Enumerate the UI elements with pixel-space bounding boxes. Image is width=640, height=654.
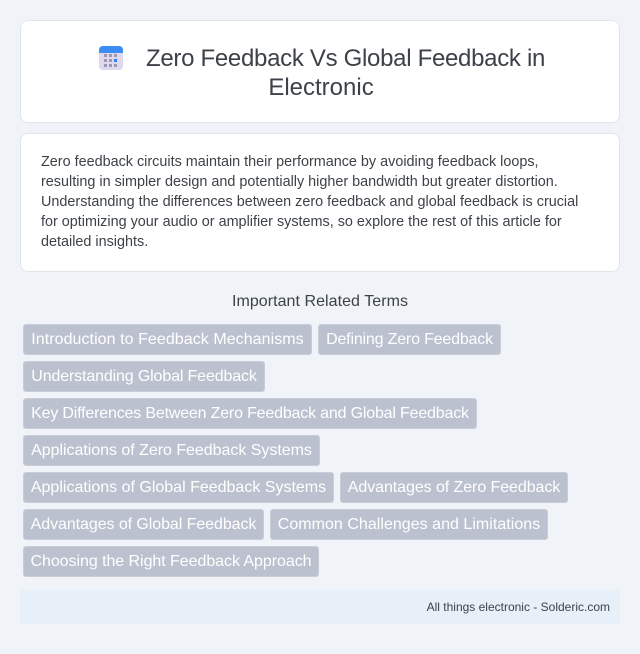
tag [23, 361, 265, 392]
tag: Understanding Global Feedback [31, 368, 257, 385]
footer text: All things electronic - Solderic.com [427, 600, 610, 614]
intro paragraph: for optimizing your audio or amplifier systems, so explore the rest of this article for [41, 214, 562, 230]
tag: Applications of Global Feedback Systems [31, 479, 326, 496]
panel: title card [20, 20, 620, 123]
tag: Applications of Zero Feedback Systems [31, 442, 312, 459]
title: Electronic [268, 74, 374, 101]
tag [23, 509, 264, 540]
icon: calendar [99, 46, 123, 70]
tag: Choosing the Right Feedback Approach [30, 553, 312, 570]
tag [23, 398, 477, 429]
tag [318, 324, 501, 355]
tag [23, 324, 312, 355]
tag: Common Challenges and Limitations [278, 516, 540, 533]
intro paragraph: Zero feedback circuits maintain their performance by avoiding feedback loops, [41, 154, 539, 170]
heading: important related terms: Important Related Terms [232, 293, 408, 310]
intro paragraph: detailed insights. [41, 234, 148, 250]
panel: intro text card [20, 133, 620, 272]
tag list [23, 324, 568, 577]
title [146, 45, 545, 101]
tag [270, 509, 548, 540]
footer bar [20, 590, 620, 624]
intro paragraph: resulting in simpler design and potentially higher bandwidth but greater distortion. [41, 174, 558, 190]
tag: Introduction to Feedback Mechanisms [31, 331, 304, 348]
tag [23, 472, 334, 503]
tag [23, 546, 319, 577]
tag: Defining Zero Feedback [326, 331, 493, 348]
tag [340, 472, 568, 503]
tag: Advantages of Zero Feedback [348, 479, 560, 496]
intro paragraph: Understanding the differences between zero feedback and global feedback is crucial [41, 194, 578, 210]
tag: Advantages of Global Feedback [31, 516, 256, 533]
title: Zero Feedback Vs Global Feedback in [146, 45, 545, 72]
tag: Key Differences Between Zero Feedback and Global Feedback [31, 405, 469, 422]
tag [23, 435, 320, 466]
intro paragraph [41, 154, 578, 250]
